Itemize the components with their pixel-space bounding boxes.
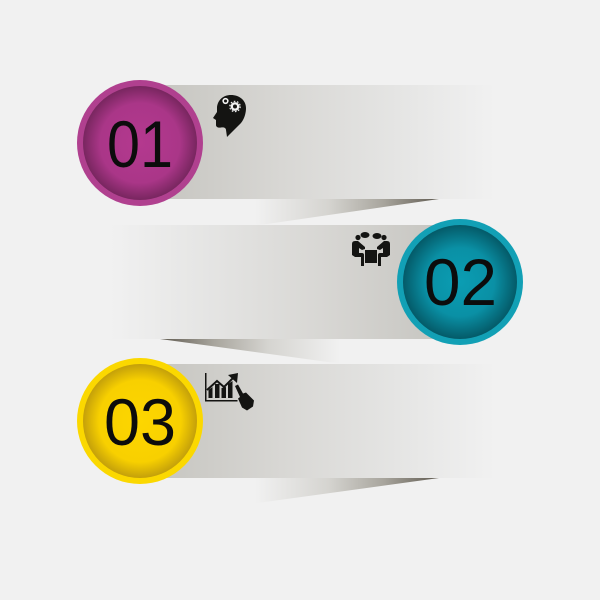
icon: two people talking at a table <box>352 232 390 266</box>
badge: 01 <box>77 80 203 206</box>
badge: 03 <box>77 358 203 484</box>
badge: 02: 02 <box>424 245 497 319</box>
fold shadow: step 2 <box>160 339 430 364</box>
icon: growth chart with pointing hand <box>205 373 254 410</box>
fold shadow: step 1 <box>170 199 439 225</box>
badge: 01: 01 <box>107 107 173 181</box>
panel: step 3 band <box>140 364 495 478</box>
fold shadow: step 3 <box>200 478 439 506</box>
panel: step 1 band <box>140 85 495 199</box>
panel: step 2 band <box>110 225 460 339</box>
badge: 02 <box>397 219 523 345</box>
badge: 03: 03 <box>104 385 176 459</box>
icon: head with gears <box>213 95 246 137</box>
